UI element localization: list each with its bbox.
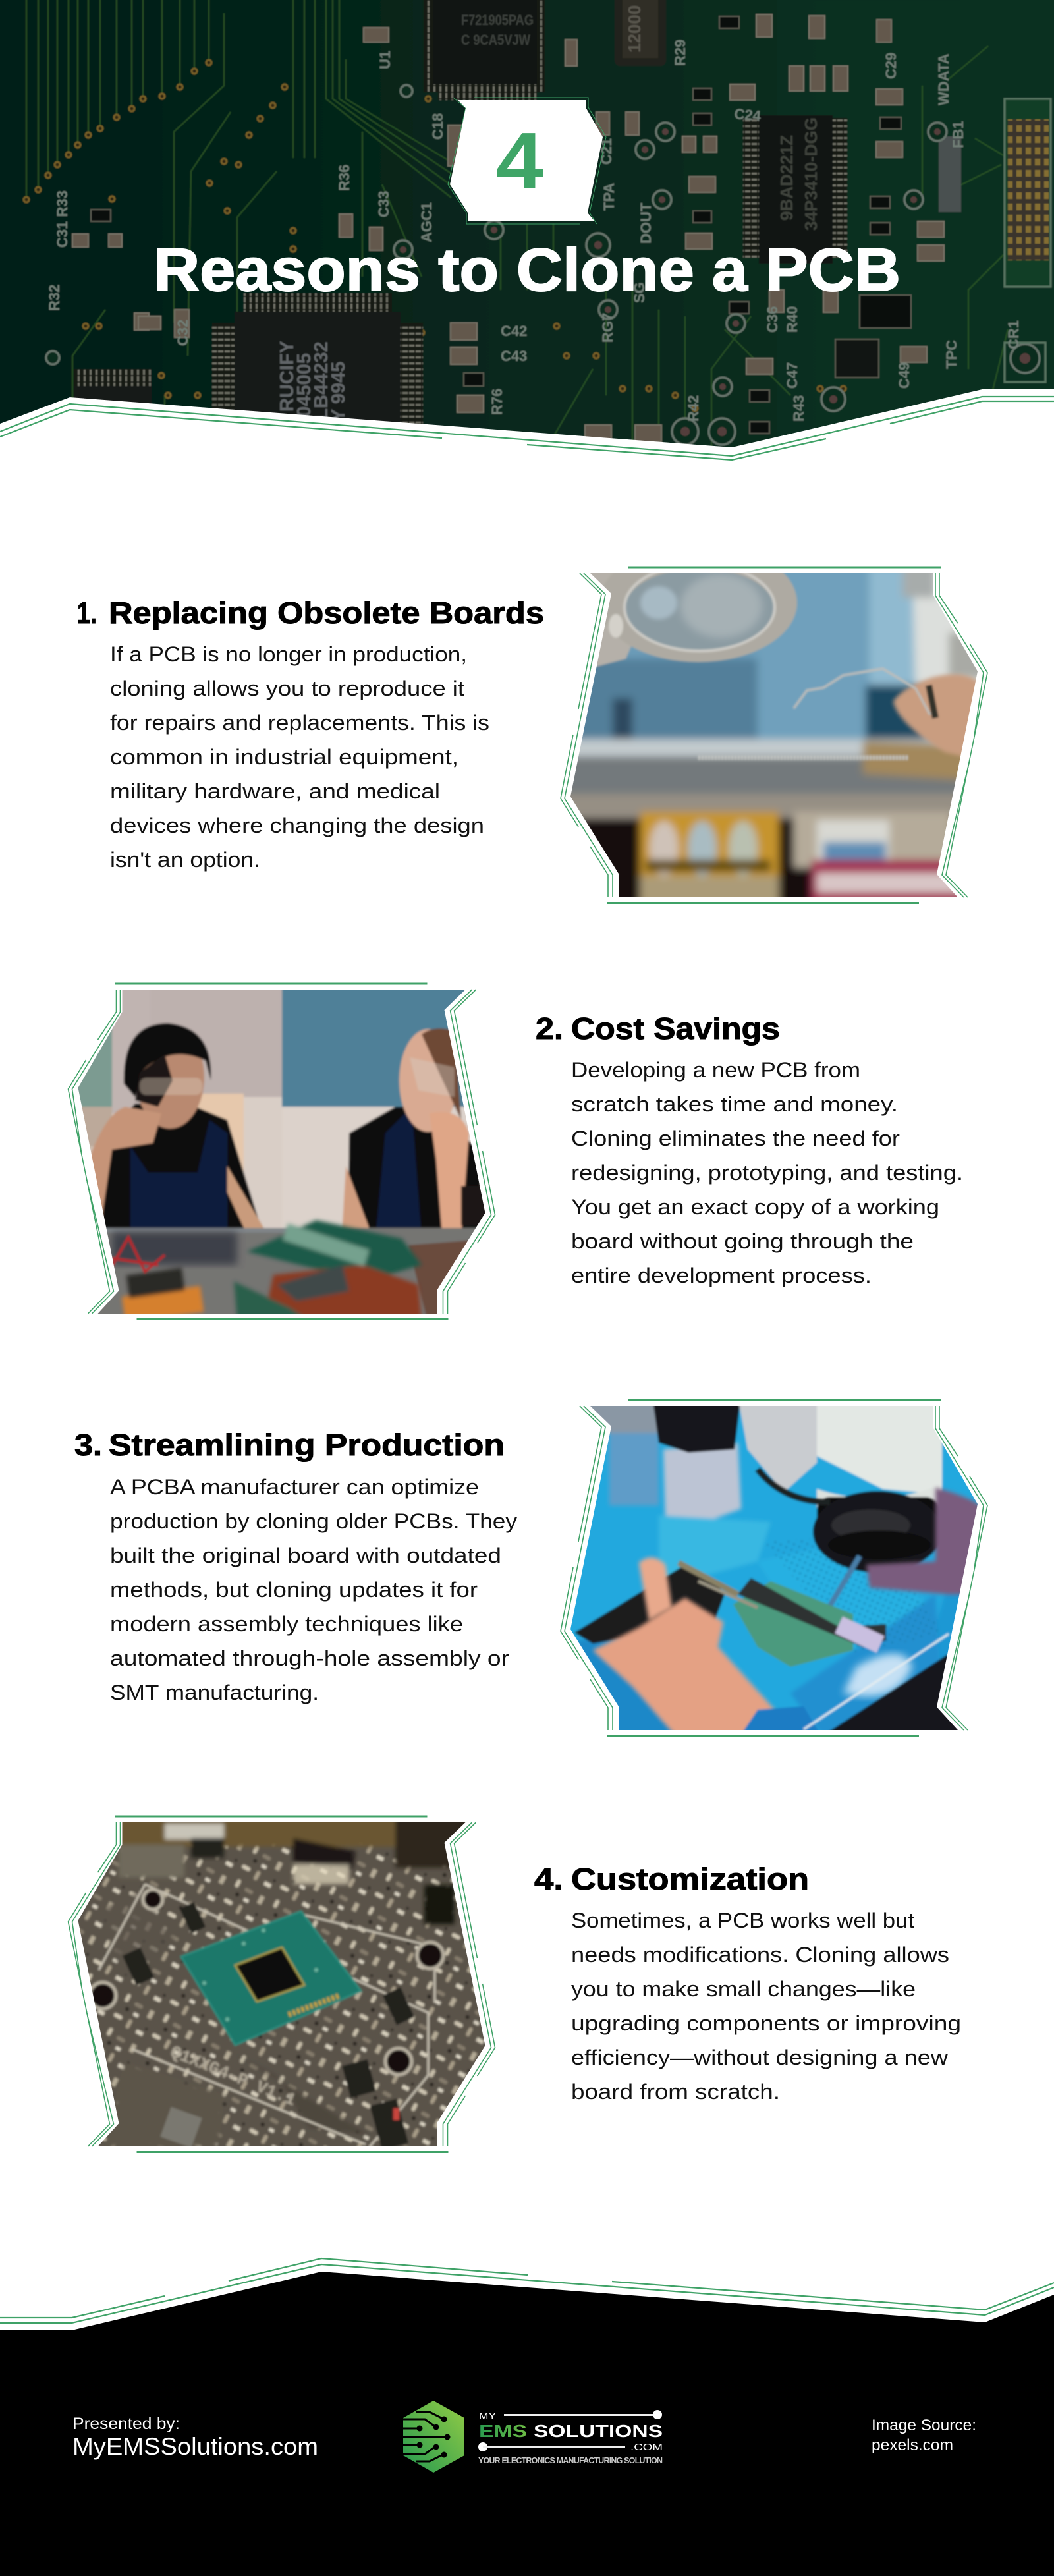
silkscreen labels: DOUT <box>638 202 654 244</box>
silkscreen labels: R36 <box>336 165 352 191</box>
chip: bottom left: RUCIFY <box>277 341 298 412</box>
section 4 text block: you to make small changes—like <box>571 1977 916 2001</box>
section 4 text block: upgrading components or improving <box>571 2011 961 2035</box>
section 2 text block: Cloning eliminates the need for <box>571 1127 900 1150</box>
section 2 text block: scratch takes time and money. <box>571 1092 898 1116</box>
silkscreen labels: R32 <box>46 285 63 311</box>
image source: Image Source: <box>872 2417 976 2434</box>
silkscreen labels: R43 <box>790 395 807 422</box>
section 3 text block: 3. <box>74 1428 102 1462</box>
presented by: Presented by: <box>72 2415 180 2433</box>
chip: right tall: 34P3410-DGG <box>801 117 821 231</box>
section 3 text block: automated through-hole assembly or <box>110 1646 509 1670</box>
silkscreen labels: TPC <box>943 340 960 369</box>
silkscreen labels: U1 <box>377 51 393 69</box>
logo: My EMS Solutions <box>403 2401 663 2473</box>
scope <box>652 1406 741 1454</box>
iron <box>574 1565 725 1644</box>
section 3 photo: soldering under microscope <box>570 1406 978 1730</box>
silkscreen labels: C21 <box>598 138 615 165</box>
chip: right tall <box>743 115 847 264</box>
silkscreen labels: R76 <box>489 389 505 415</box>
connector <box>939 99 1051 287</box>
section 2 text block: redesigning, prototyping, and testing. <box>571 1161 963 1185</box>
silkscreen labels: C36 <box>764 306 781 333</box>
section 4 text block: efficiency—without designing a new <box>571 2046 949 2069</box>
section 1 photo: magnifier over circuit board <box>570 573 978 897</box>
silkscreen labels: RG7 <box>599 313 616 343</box>
logo: My EMS Solutions: YOUR ELECTRONICS MANUFACTURING SOLUTION <box>478 2456 663 2465</box>
header: circuit board photo banner <box>0 0 1054 468</box>
section 1 text block: common in industrial equipment, <box>110 745 458 769</box>
section 4 text block: Customization <box>571 1862 809 1896</box>
logo: My EMS Solutions: EMS <box>479 2421 527 2441</box>
small components <box>46 14 1045 445</box>
section 4 photo frame <box>69 1816 495 2153</box>
logo: My EMS Solutions: .COM <box>630 2442 663 2453</box>
silkscreen labels: CR1 <box>1005 320 1022 349</box>
person left <box>102 1102 259 1230</box>
silkscreen labels: C33 <box>375 191 392 217</box>
section 2 photo: two technicians with boards <box>78 990 485 1314</box>
chip: right tall: 9BAD221Z <box>777 135 796 221</box>
silkscreen labels: TPA <box>601 183 617 211</box>
footer wave lines <box>0 2258 1054 2323</box>
section 1 text block: devices where changing the design <box>110 814 484 837</box>
chip: bottom left: Y 9945 <box>328 362 349 422</box>
silkscreen labels: C32 <box>175 320 191 346</box>
section 4 photo: chip on motherboard <box>78 1822 485 2146</box>
chip: bottom left: 03045005 <box>294 353 315 438</box>
section 2 photo frame <box>69 983 495 1320</box>
silkscreen labels: C43 <box>501 348 527 364</box>
silkscreen labels: R29 <box>672 40 688 66</box>
section 3 text block: methods, but cloning updates it for <box>110 1578 478 1602</box>
section 4 text block: Sometimes, a PCB works well but <box>571 1909 914 1932</box>
presented by <box>72 2415 318 2460</box>
section 2 text block: Cost Savings <box>571 1011 780 1046</box>
section 1 text block: military hardware, and medical <box>110 779 440 803</box>
presented by: MyEMSSolutions.com <box>72 2433 318 2460</box>
section 4 text block: needs modifications. Cloning allows <box>571 1943 949 1967</box>
silkscreen labels: C47 <box>784 362 800 389</box>
table <box>97 1225 477 1314</box>
small ics <box>123 1902 414 2150</box>
section 2 text block: 2. <box>536 1011 563 1046</box>
chip: bottom left: WLB44232 <box>311 341 332 438</box>
silkscreen labels: FB1 <box>950 121 966 148</box>
chip: top: C 9CA5VJW <box>461 32 530 48</box>
section 2 text block: board without going through the <box>571 1229 914 1253</box>
board <box>733 1581 853 1667</box>
header wave lines <box>0 397 1054 460</box>
section 3 text block: modern assembly techniques like <box>110 1612 463 1636</box>
silkscreen labels: R40 <box>784 306 800 333</box>
section 1 text block: isn't an option. <box>110 848 260 872</box>
number badge: 4 <box>496 116 543 206</box>
crystal: 12000 <box>624 5 644 53</box>
section 3 text block: production by cloning older PCBs. They <box>110 1509 518 1533</box>
section 4 photo: chip on motherboard: Q1XXG4-P V1.1 <box>167 2042 298 2110</box>
silkscreen labels: C18 <box>430 113 446 140</box>
person right <box>348 1107 481 1235</box>
section 1 text block: cloning allows you to reproduce it <box>110 677 464 700</box>
section 3 text block: SMT manufacturing. <box>110 1681 319 1704</box>
section 3 text block: built the original board with outdated <box>110 1544 501 1567</box>
section 4 text block <box>534 1862 961 2104</box>
chip: bottom left <box>211 293 424 424</box>
section 3 text block: A PCBA manufacturer can optimize <box>110 1475 479 1499</box>
silkscreen labels: C42 <box>501 323 527 339</box>
chip: small lower left <box>74 368 152 403</box>
section 2 text block <box>536 1011 963 1287</box>
chip: top: F721905PAG <box>461 12 534 28</box>
icon: circuit hexagon <box>403 2401 464 2473</box>
silkscreen labels: R42 <box>685 395 702 422</box>
silkscreen labels: C24 <box>734 105 762 125</box>
chip: top <box>424 0 545 100</box>
silkscreen labels <box>46 40 1022 422</box>
purple glove <box>866 1488 985 1594</box>
section 1 text block: Replacing Obsolete Boards <box>109 596 544 630</box>
logo: My EMS Solutions: MY <box>479 2411 496 2422</box>
section 1 photo frame <box>561 567 987 904</box>
chip: small lower left: AT 9948 <box>91 403 150 420</box>
silkscreen labels: SG <box>631 282 648 303</box>
crystal <box>615 0 666 66</box>
silkscreen labels: C49 <box>896 362 912 389</box>
image source <box>872 2417 976 2454</box>
section 2 text block: You get an exact copy of a working <box>571 1195 939 1219</box>
title: Reasons to Clone a PCB <box>153 237 901 304</box>
footer black panel <box>0 2272 1054 2576</box>
section 4 text block: 4. <box>534 1862 563 1896</box>
section 2 text block: Developing a new PCB from <box>571 1058 860 1082</box>
silkscreen labels: WDATA <box>935 53 952 105</box>
section 3 text block <box>74 1428 518 1704</box>
section 3 text block: Streamlining Production <box>109 1428 505 1462</box>
number badge <box>448 98 606 224</box>
teal chip <box>181 1911 361 2045</box>
section 1 text block <box>77 596 544 872</box>
silkscreen labels: C29 <box>883 53 899 79</box>
hand <box>590 1595 777 1730</box>
section 1 text block: 1. <box>77 596 97 630</box>
logo: My EMS Solutions: SOLUTIONS <box>534 2421 663 2441</box>
image source: pexels.com <box>872 2436 953 2454</box>
silkscreen outlines <box>99 1884 435 2148</box>
dark corner <box>804 1634 949 1729</box>
silkscreen labels: C31 R33 <box>54 190 70 248</box>
mounting holes <box>90 1890 443 2075</box>
section 1 text block: If a PCB is no longer in production, <box>110 642 467 666</box>
silkscreen labels: AGC1 <box>418 202 435 242</box>
section 4 text block: board from scratch. <box>571 2080 780 2104</box>
tweezers <box>827 1553 864 1607</box>
section 1 text block: for repairs and replacements. This is <box>110 711 489 735</box>
section 3 photo frame <box>561 1399 987 1737</box>
section 2 text block: entire development process. <box>571 1264 872 1287</box>
